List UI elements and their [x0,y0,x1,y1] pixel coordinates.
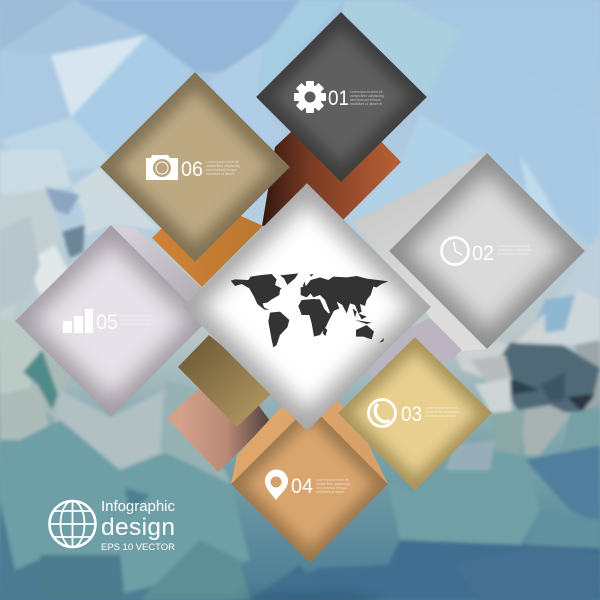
number 04: 04 [291,475,313,498]
description text 02: sed eiusmod tempor [497,252,529,256]
number 02: 02 [472,242,494,265]
description text 06: incididunt ut labore [206,172,235,176]
description text 04: incididunt ut labore [316,490,345,494]
description text 04: sed eiusmod tempor [316,486,348,490]
description text 06 [206,160,240,176]
description text 04: Lorem ipsum dolor sit [316,478,348,482]
bottom shadow [240,595,380,600]
icon: gear [294,81,326,113]
description text 01: sed eiusmod tempor [350,98,382,102]
logo text: EPS 10 VECTOR [101,542,175,553]
icon: map pin [265,470,288,500]
number 06: 06 [181,158,203,181]
panel: 04 location [231,405,388,563]
description text 01: Lorem ipsum dolor sit [350,90,382,94]
description text 06: Lorem ipsum dolor sit [206,160,238,164]
description text 03: consectetur adipiscing [425,410,459,414]
logo text: design [101,514,175,541]
description text 02 [497,244,531,256]
description text 05: Lorem ipsum dolor sit [120,314,152,318]
back panel: grey fold behind 02 [352,153,487,352]
panel: central world map [183,183,431,431]
description text 02: Lorem ipsum dolor sit [497,244,529,248]
panel: 03 phone [338,337,492,491]
number 03: 03 [401,403,422,426]
icon: camera [146,155,178,180]
description text 01 [350,90,384,106]
logo text: Infographic [101,498,176,515]
description text 06: sed eiusmod tempor [206,168,238,172]
description text 03: Lorem ipsum dolor sit [425,406,457,410]
number 05: 05 [96,311,118,334]
number 01: 01 [328,87,349,110]
description text 03: sed eiusmod tempor [425,414,457,418]
logo: globe icon [50,501,96,547]
description text 04 [316,478,350,494]
description text 05: consectetur adipiscing [120,318,154,322]
back panel: orange band behind 06 [152,195,263,287]
back panel: peach fold behind 04 [231,392,388,484]
back panel: lavender fold behind 05 [111,225,210,320]
icon: phone [368,400,396,426]
back panel: pink square [167,380,270,472]
description text 05 [120,314,154,326]
back panel: rust fold behind 01 [262,100,401,226]
description text 01: consectetur adipiscing [350,94,384,98]
panel: 02 clock [389,153,585,349]
back panel: olive square [178,335,275,427]
logo text [101,498,176,553]
panel: 05 chart [15,225,207,417]
icon: bars [63,309,93,333]
description text 05: sed eiusmod tempor [120,322,152,326]
panel: 01 gear [256,12,427,182]
icon: clock [442,238,468,264]
description text 06: consectetur adipiscing [206,164,240,168]
panel: 06 camera [100,72,290,262]
description text 03 [425,406,459,418]
description text 04: consectetur adipiscing [316,482,350,486]
back panel: lavender strip behind 03 [367,318,462,378]
description text 02: consectetur adipiscing [497,248,531,252]
description text 01: incididunt ut labore et [350,102,382,106]
world map [231,273,388,347]
